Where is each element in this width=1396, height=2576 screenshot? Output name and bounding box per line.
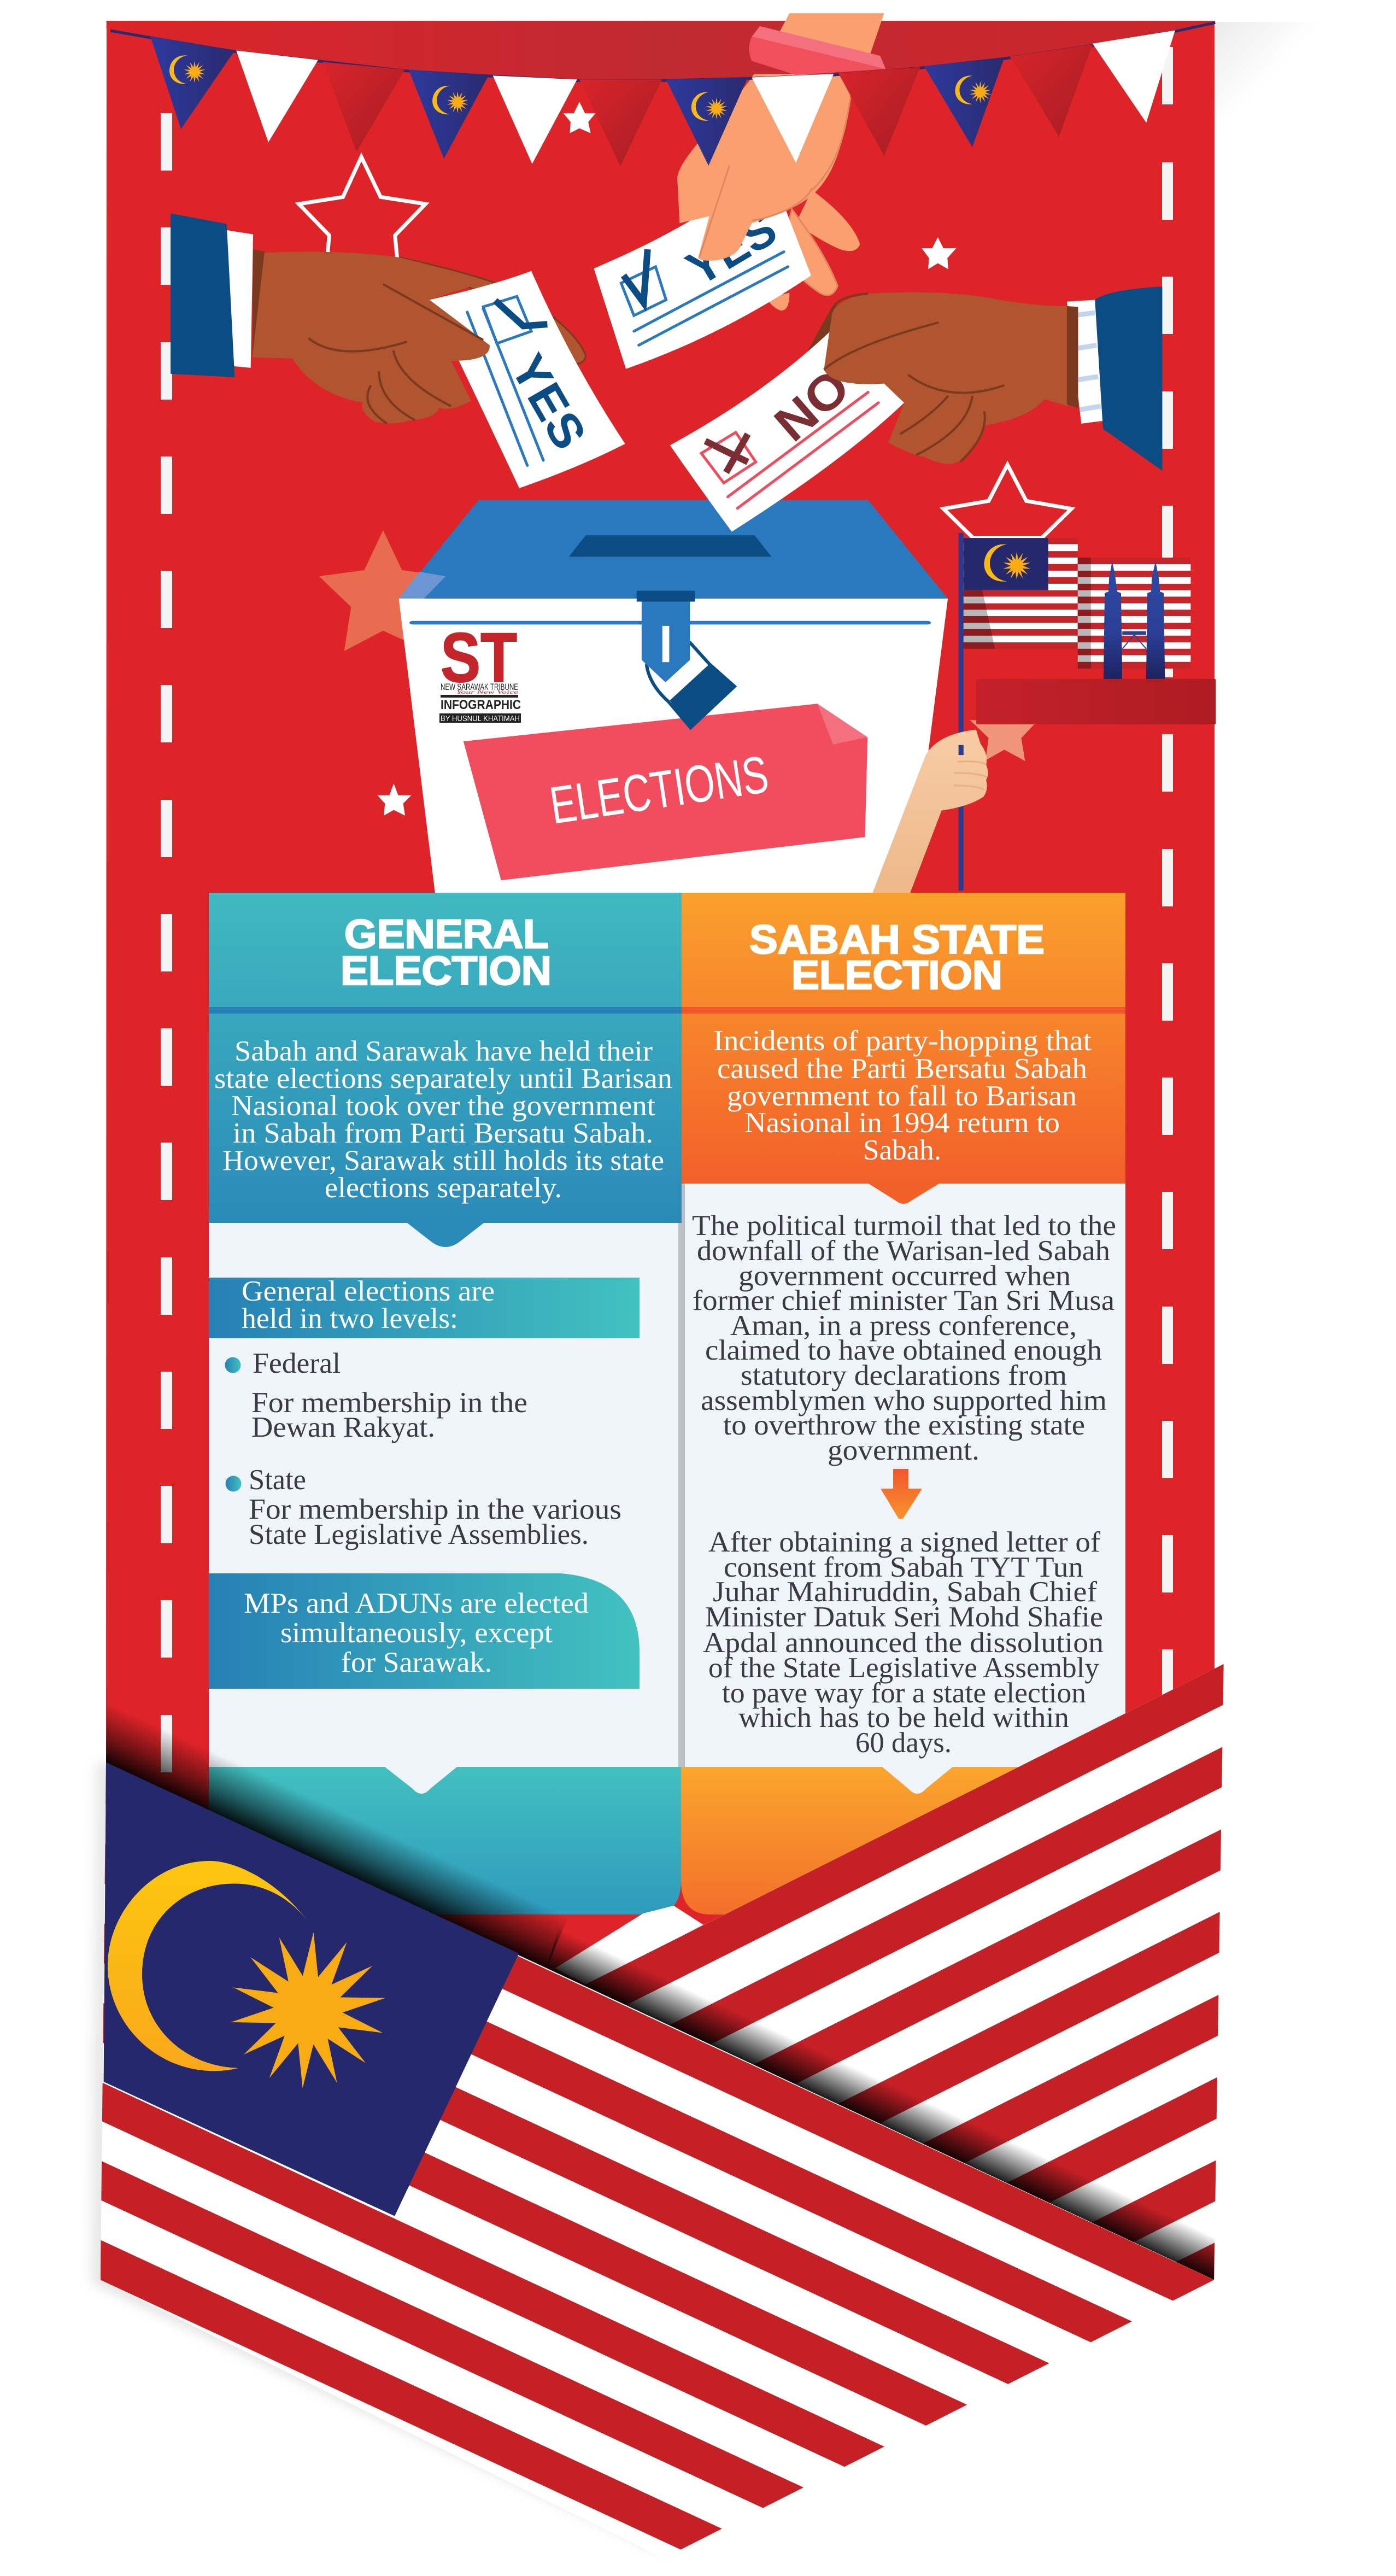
ballot slot [569,535,772,557]
ST New Sarawak Tribune infographic logo: NEW SARAWAK TRIBUNE [441,682,518,692]
teal footer notch [385,1767,457,1794]
flag stripes [101,1762,1221,2569]
orange footer notch [882,1767,953,1794]
heading: general election: ELECTION [341,948,552,993]
list item: federal [225,1348,527,1443]
body paragraph: dissolution: After obtaining a signed letter of [708,1526,1100,1558]
ballot YES left [430,271,625,488]
mini flag with Petronas towers [1078,558,1190,680]
gradient bar: two levels [209,1275,640,1338]
orange header divider [682,1007,1125,1014]
body paragraph: political turmoil: statutory declarations from [741,1360,1067,1391]
list item: state: For membership in the various [249,1494,621,1525]
callout: MPs and ADUNs: simultaneously, except [280,1617,553,1649]
intro paragraph: caused the Parti Bersatu Sabah [717,1053,1087,1085]
outline star behind flags [943,465,1071,538]
soft flag shadow [101,1763,663,2548]
left hand front [253,249,490,424]
shadow cast by left flag on stripes [547,1913,1215,2280]
intro paragraph: Nasional in 1994 return to [744,1107,1060,1139]
list item: state: State Legislative Assemblies. [249,1519,589,1550]
lock tag [637,591,735,728]
red banner background [106,21,1215,1990]
intro paragraph: Sabah and Sarawak have held their [234,1035,653,1067]
intro paragraph: Sabah. [863,1134,941,1166]
ST New Sarawak Tribune infographic logo: INFOGRAPHIC [441,698,521,712]
bunting flags [150,30,1175,166]
heading: general election [341,911,552,993]
salmon star behind sign [970,720,1035,761]
body paragraph: political turmoil: government occurred when [738,1260,1071,1292]
body paragraph: dissolution: consent from Sabah TYT Tun [724,1552,1083,1583]
mini Malaysian flag [964,538,1078,649]
orange footer [681,1767,1125,1915]
flag pole [959,533,964,891]
ST New Sarawak Tribune infographic logo: Your New Voice [456,689,518,695]
body paragraph: dissolution [703,1526,1104,1759]
intro paragraph: Incidents of party-hopping that [713,1025,1092,1057]
body paragraph: dissolution: Minister Datuk Seri Mohd Shafie [705,1601,1103,1633]
top hand and arm [677,13,885,261]
ST New Sarawak Tribune infographic logo [439,619,521,723]
hands, ballots and bunting [107,13,1215,532]
body paragraph: political turmoil: downfall of the Warisan-led Sabah [697,1235,1110,1267]
ELECTIONS label: ELECTIONS [546,745,772,835]
callout: MPs and ADUNs [209,1573,640,1689]
body paragraph: political turmoil [692,1210,1116,1466]
hand holding flag pole [872,730,988,893]
panel body background [209,1223,682,1767]
intro paragraph [713,1025,1092,1166]
star seen through lid [399,572,446,599]
dashed road lines [161,47,1173,1772]
small white stars [564,102,956,269]
list item: federal: Dewan Rakyat. [251,1412,435,1443]
list item: federal: Federal [253,1348,341,1379]
white star left of box [378,783,412,816]
teal header block [209,893,682,1223]
orange tab pointer [869,1184,939,1204]
heading: general election: GENERAL [344,911,549,957]
body paragraph: dissolution: 60 days. [855,1727,952,1759]
box body [399,599,948,894]
list item: federal: For membership in the [251,1387,527,1419]
ST New Sarawak Tribune infographic logo: ST [441,619,517,697]
callout: MPs and ADUNs: MPs and ADUNs are elected [244,1588,589,1619]
column divider [678,1184,685,1767]
body paragraph: political turmoil: claimed to have obtained enough [705,1334,1102,1366]
right diagonal flag stripes [571,1661,1229,2311]
ballot YES centre [594,209,811,369]
left sleeve [171,213,253,377]
intro paragraph: state elections separately until Barisan [214,1063,672,1094]
intro paragraph: elections separately. [325,1172,562,1204]
panel: general election [209,893,685,1915]
teal header divider [209,1007,682,1014]
body paragraph: political turmoil: Aman, in a press conference, [730,1310,1077,1342]
body paragraph: political turmoil: assemblymen who supported him [701,1385,1107,1416]
gradient bar: two levels: General elections are [242,1275,495,1307]
pink elections paper [464,704,867,880]
heading: Sabah state election [749,917,1045,998]
ballot box illustration [319,465,1216,894]
teal footer [209,1767,681,1915]
ballot NO [670,331,904,532]
body paragraph: dissolution: of the State Legislative Assembly [708,1652,1100,1684]
heading: Sabah state election: SABAH STATE [749,917,1045,962]
bunting string [110,22,1215,80]
arrow down [881,1469,922,1519]
seal line [409,621,931,624]
flag canton [104,1763,519,2216]
body paragraph: political turmoil: to overthrow the existing state [723,1409,1085,1441]
dark red sign [976,679,1216,724]
left hand behind ballot [399,257,586,364]
box lid [399,500,948,599]
intro paragraph: Nasional took over the government [231,1090,655,1122]
orange star behind box [319,530,446,651]
intro paragraph [214,1035,672,1204]
body paragraph: dissolution: Apdal announced the dissolution [703,1627,1104,1659]
panel: Sabah state election [681,893,1125,1915]
intro paragraph: However, Sarawak still holds its state [222,1145,664,1176]
NO text on right ballot: NO [765,359,860,452]
intro paragraph: government to fall to Barisan [727,1080,1077,1112]
right sleeve and cuff [1067,286,1162,471]
body paragraph: dissolution: to pave way for a state election [722,1677,1086,1709]
stripe wedge behind flag [555,1906,703,1985]
fingers behind ballot [768,190,860,311]
heading: Sabah state election: ELECTION [791,952,1002,998]
callout: MPs and ADUNs: for Sarawak. [341,1647,492,1678]
panel body background [682,1184,1125,1767]
swag of bunting [107,21,1215,79]
body paragraph: political turmoil: The political turmoil that led to the [692,1210,1116,1242]
YES text on centre ballot: YES [677,201,785,296]
Malaysian flag, left diagonal [101,1762,1221,2569]
YES text on left ballot: YES [501,345,597,458]
orange header block [682,893,1125,1184]
gradient bar: two levels: held in two levels: [242,1303,458,1334]
body paragraph: political turmoil: former chief minister Tan Sri Musa [693,1285,1115,1316]
banner drop shadow, top right [1215,22,1328,131]
fourteen point star [225,1927,391,2094]
shadow cast by canton on panels [106,1689,574,1968]
outline star top left [299,157,425,279]
body paragraph: dissolution: Juhar Mahiruddin, Sabah Chief [713,1576,1097,1608]
list item: state [225,1464,621,1550]
bottom flag tail [101,1661,1229,2548]
list item: state: State [249,1464,306,1496]
intro paragraph: in Sabah from Parti Bersatu Sabah. [233,1117,653,1149]
body paragraph: political turmoil: government. [828,1435,979,1466]
right hand front [824,292,1078,464]
right hand behind ballot [808,296,868,350]
body paragraph: dissolution: which has to be held within [738,1702,1069,1734]
teal tab pointer [407,1223,484,1247]
crescent [108,1861,307,2071]
ST New Sarawak Tribune infographic logo: BY HUSNUL KHATIMAH [441,714,520,723]
